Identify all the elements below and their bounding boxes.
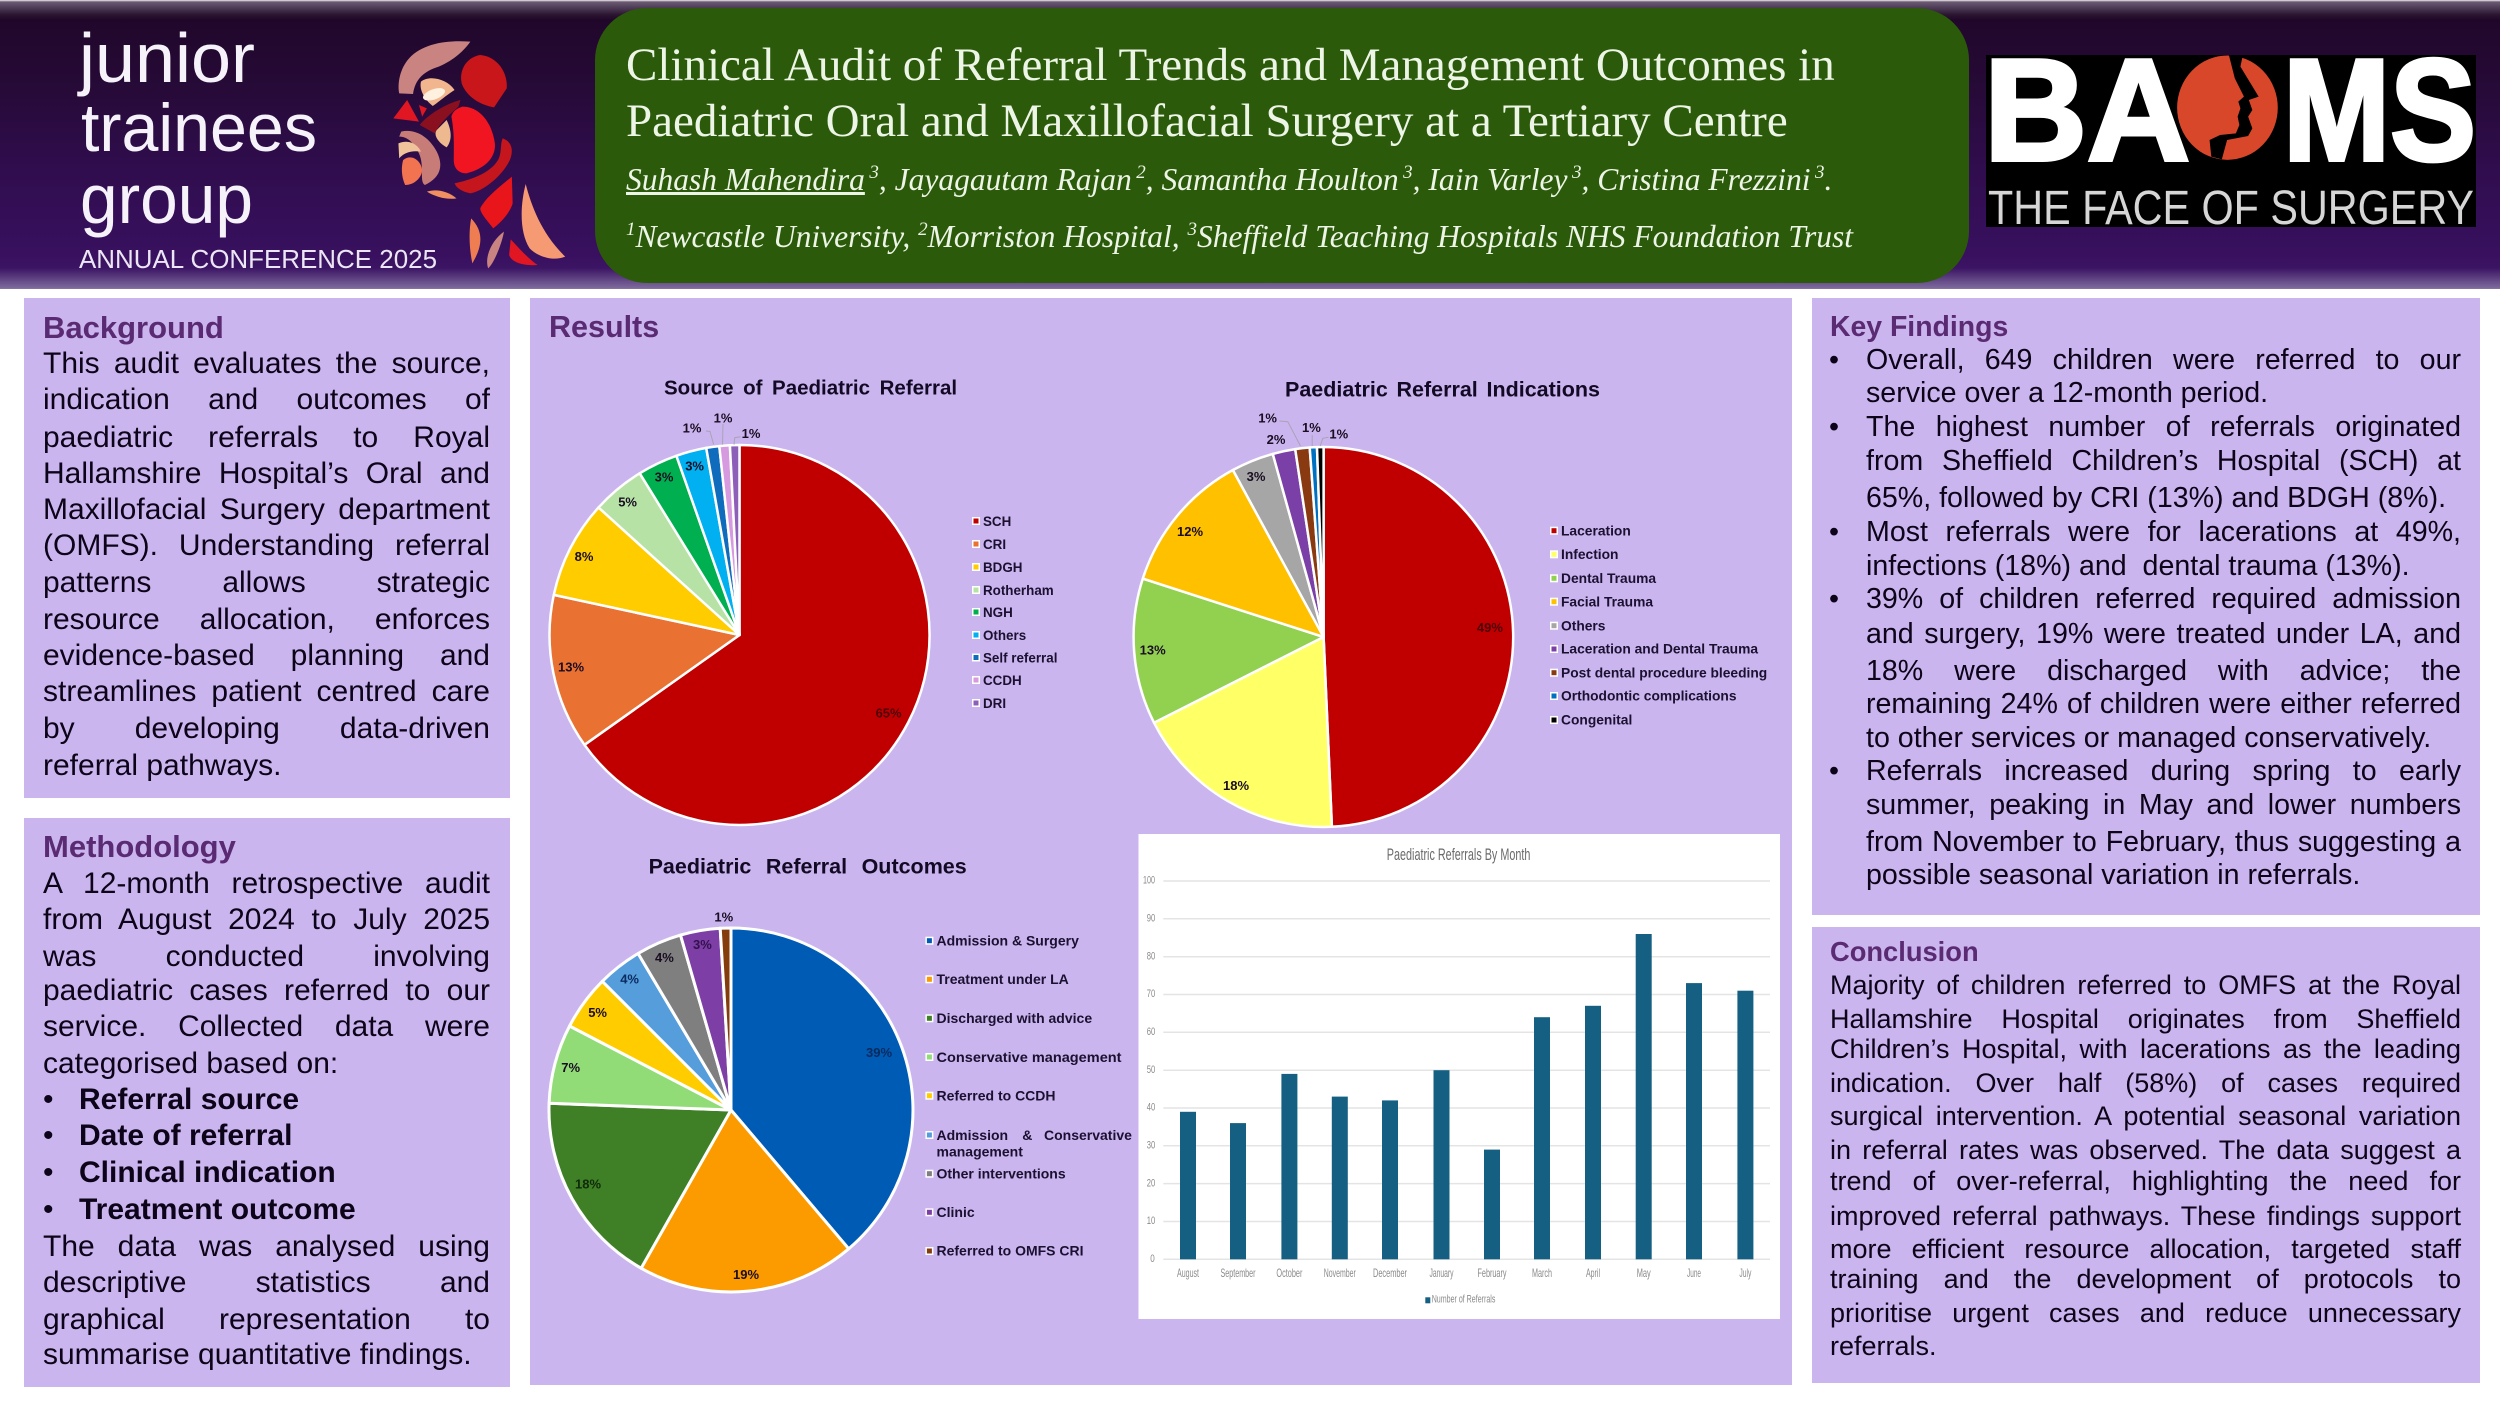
pie chart: source of paediatric referral: 1%: [742, 426, 761, 441]
legend: referral indications: Others: [1561, 618, 1606, 634]
bar chart: paediatric referrals by month: September: [1220, 1266, 1256, 1280]
legend: referral sources: Rotherham: [983, 583, 1054, 598]
pie chart: paediatric referral indications: 13%: [1140, 642, 1166, 658]
text block: conclusion: training and the development of protocols to: [1830, 1264, 2461, 1294]
list: key findings: •: [1829, 583, 1839, 615]
legend: referral outcomes: Referred to OMFS CRI: [936, 1242, 1084, 1258]
list: key findings: •: [1829, 411, 1839, 443]
text block: methodology analysis: The data was analysed using: [43, 1230, 490, 1263]
text block: background: Maxillofacial Surgery department: [43, 493, 490, 526]
legend: referral outcomes: Conservative management: [936, 1049, 1122, 1065]
list: key findings: Most referrals were for lacerations at 49%,: [1866, 516, 2461, 548]
list: key findings: 18% were discharged with advice; the: [1866, 655, 2461, 687]
legend: referral sources: BDGH: [983, 560, 1022, 575]
bar chart: paediatric referrals by month: October: [1276, 1266, 1302, 1280]
bar chart: paediatric referrals by month: May: [1637, 1266, 1651, 1280]
pie chart: paediatric referral indications: 12%: [1177, 524, 1203, 539]
text block: methodology intro: [43, 867, 490, 1080]
text block: background: evidence-based planning and: [43, 639, 490, 672]
pie chart: paediatric referral outcomes: 5%: [588, 1005, 607, 1020]
legend: referral sources: Others: [983, 628, 1026, 643]
logo: junior trainees group wordmark: junior: [77, 19, 255, 97]
text block: methodology analysis: [43, 1230, 490, 1371]
list: categorised data fields: •: [43, 1119, 54, 1152]
pie chart: paediatric referral indications: Paediatric Referral Indications: [1285, 378, 1600, 402]
text block: methodology analysis: descriptive statistics and: [43, 1266, 490, 1299]
heading: background: Background: [43, 310, 224, 345]
legend: referral outcomes: management: [936, 1144, 1023, 1160]
pie chart: paediatric referral outcomes: 39%: [866, 1045, 892, 1060]
legend: referral sources: SCH: [983, 514, 1011, 529]
text block: background: (OMFS). Understanding referral: [43, 529, 490, 562]
text block: conclusion: trend of over-referral, highlighting the need for: [1830, 1166, 2461, 1196]
list: key findings: remaining 24% of children were either referred: [1866, 688, 2461, 720]
list: categorised data fields: •: [43, 1193, 54, 1226]
bar chart: paediatric referrals by month: 50: [1147, 1064, 1155, 1076]
text block: conclusion: Children’s Hospital, with lacerations as the leading: [1830, 1034, 2461, 1064]
bar chart: paediatric referrals by month: December: [1373, 1266, 1407, 1280]
pie chart: paediatric referral indications: 18%: [1223, 778, 1249, 793]
legend: referral outcomes: Discharged with advice: [936, 1010, 1092, 1026]
heading: results: Results: [549, 310, 659, 344]
bar chart: paediatric referrals by month: Paediatric Referrals By Month: [1387, 845, 1530, 864]
legend: referral indications: Congenital: [1561, 712, 1632, 728]
list: categorised data fields: Treatment outcome: [79, 1193, 356, 1226]
list: key findings: summer, peaking in May and lower numbers: [1866, 789, 2461, 821]
pie chart: paediatric referral outcomes: 19%: [733, 1267, 759, 1282]
bar chart: paediatric referrals by month: 40: [1147, 1102, 1155, 1114]
title box: [595, 8, 1969, 283]
bar chart: paediatric referrals by month: 60: [1147, 1026, 1155, 1038]
text block: background: resource allocation, enforces: [43, 603, 490, 636]
list: categorised data fields: •: [43, 1083, 54, 1116]
legend: referral outcomes: Clinic: [936, 1204, 975, 1220]
text block: background: indication and outcomes of: [43, 383, 490, 416]
bar chart: paediatric referrals by month: 90: [1147, 912, 1155, 924]
pie chart: source of paediatric referral: 3%: [685, 458, 704, 474]
pie chart: paediatric referral indications: 3%: [1247, 469, 1266, 484]
pie chart: source of paediatric referral: 3%: [655, 470, 674, 484]
legend: referral indications: Infection: [1561, 547, 1618, 562]
list: key findings: from November to February, thus suggesting a: [1866, 826, 2461, 858]
legend: referral indications: Dental Trauma: [1561, 571, 1656, 586]
list: key findings: possible seasonal variation in referrals.: [1866, 859, 2360, 891]
list: key findings: Overall, 649 children were referred to our: [1866, 344, 2461, 376]
pie chart: source of paediatric referral: 65%: [876, 706, 902, 720]
list: categorised data fields: Clinical indication: [79, 1156, 336, 1189]
legend: referral sources: NGH: [983, 605, 1013, 620]
legend: referral indications: Laceration and Dental Trauma: [1561, 642, 1758, 656]
text block: background: paediatric referrals to Royal: [43, 420, 490, 454]
pie chart: source of paediatric referral: Source of Paediatric Referral: [664, 377, 957, 400]
charts container: [548, 377, 1780, 1319]
authors: Suhash Mahendira3, Jayagautam Rajan2, Samantha Houlton3, Iain Varley3, Cristina Frezzini3.: [626, 162, 1832, 196]
pie chart: paediatric referral outcomes: 4%: [655, 950, 674, 965]
legend: referral sources: DRI: [983, 696, 1006, 711]
list: key findings: to other services or managed conservatively.: [1866, 722, 2431, 754]
list: key findings: and surgery, 19% were treated under LA, and: [1866, 618, 2461, 650]
legend: referral sources: CCDH: [983, 673, 1022, 688]
logo: BAOMS The Face of Surgery: [1986, 55, 2476, 227]
text block: methodology analysis: graphical representation to: [43, 1303, 490, 1336]
text block: methodology intro: A 12-month retrospective audit: [43, 867, 490, 900]
pie chart: paediatric referral outcomes: [549, 854, 1132, 1292]
text block: background: referral pathways.: [43, 749, 281, 782]
list: key findings: 39% of children referred required admission: [1866, 583, 2461, 615]
bar chart: paediatric referrals by month: November: [1324, 1266, 1356, 1280]
text block: methodology intro: was conducted involving: [43, 940, 490, 973]
text block: conclusion: improved referral pathways. These findings support: [1830, 1201, 2461, 1231]
logo: junior trainees group wordmark: group: [80, 160, 253, 238]
pie chart: source of paediatric referral: [550, 377, 1057, 825]
pie chart: paediatric referral outcomes: 4%: [620, 972, 639, 986]
bar chart: paediatric referrals by month: 100: [1143, 874, 1155, 886]
legend: referral outcomes: Treatment under LA: [936, 971, 1069, 987]
legend: referral outcomes: Referred to CCDH: [936, 1088, 1056, 1104]
bar chart: paediatric referrals by month: February: [1478, 1266, 1506, 1280]
logo: junior trainees group wordmark: ANNUAL CONFERENCE 2025: [79, 244, 437, 274]
text block: conclusion: more efficient resource allocation, targeted staff: [1830, 1234, 2461, 1264]
legend: referral sources: CRI: [983, 537, 1006, 552]
panel: results: [530, 298, 1792, 1385]
affiliations: 1Newcastle University, 2Morriston Hospital, 3Sheffield Teaching Hospitals NHS Foundation Trust: [626, 218, 1853, 254]
bar chart: paediatric referrals by month: Number of Referrals: [1432, 1294, 1496, 1306]
list: key findings: •: [1829, 344, 1839, 376]
text block: background: [43, 347, 490, 782]
pie chart: paediatric referral indications: 49%: [1477, 620, 1503, 635]
heading: conclusion: Conclusion: [1830, 936, 1979, 966]
list: categorised data fields: •: [43, 1156, 54, 1189]
list: key findings: infections (18%) and dental trauma (13%).: [1866, 550, 2410, 582]
heading: methodology: Methodology: [43, 829, 236, 864]
legend: referral outcomes: Conservative: [1044, 1127, 1132, 1143]
title: Clinical Audit of Referral Trends and Management Outcomes in: [626, 39, 1835, 91]
pie chart: paediatric referral indications: 1%: [1302, 420, 1321, 435]
pie chart: paediatric referral indications: 2%: [1267, 432, 1286, 447]
text block: conclusion: indication. Over half (58%) of cases required: [1830, 1068, 2461, 1098]
list: categorised data fields: [43, 1083, 356, 1226]
logo: junior trainees group wordmark: [77, 19, 437, 274]
text block: conclusion: referrals.: [1830, 1331, 1937, 1361]
bar chart: paediatric referrals by month: 20: [1147, 1178, 1155, 1190]
pie chart: source of paediatric referral: 5%: [618, 494, 637, 510]
text block: background: by developing data-driven: [43, 712, 490, 745]
bar chart: paediatric referrals by month: 80: [1147, 950, 1155, 962]
pie chart: source of paediatric referral: 1%: [683, 420, 702, 436]
text block: conclusion: Majority of children referred to OMFS at the Royal: [1830, 970, 2461, 1000]
title: Paediatric Oral and Maxillofacial Surgery at a Tertiary Centre: [626, 95, 1788, 147]
pie chart: paediatric referral outcomes: 18%: [575, 1176, 601, 1192]
text block: background: patterns allows strategic: [43, 566, 490, 599]
bar chart: paediatric referrals by month: August: [1177, 1266, 1199, 1280]
text block: methodology analysis: summarise quantitative findings.: [43, 1338, 472, 1371]
bar chart: paediatric referrals by month: January: [1430, 1266, 1454, 1280]
text block: methodology intro: categorised based on:: [43, 1047, 338, 1080]
pie chart: source of paediatric referral: 1%: [714, 410, 733, 426]
pie chart: paediatric referral outcomes: 3%: [693, 937, 712, 952]
text block: conclusion: [1830, 970, 2462, 1361]
icon: stained glass face profile: [393, 41, 566, 268]
title: [626, 39, 1835, 147]
list: key findings: The highest number of referrals originated: [1866, 411, 2461, 443]
legend: referral indications: [1550, 524, 1767, 728]
panel: key findings: [1812, 298, 2480, 915]
logo: junior trainees group wordmark: trainees: [81, 90, 317, 166]
legend: referral sources: Self referral: [983, 650, 1057, 666]
text block: conclusion: surgical intervention. A potential seasonal variation: [1830, 1101, 2461, 1131]
panel: methodology: [24, 818, 510, 1387]
bar chart: paediatric referrals by month: [1138, 834, 1780, 1319]
list: key findings: service over a 12-month period.: [1866, 377, 2268, 409]
text block: methodology intro: paediatric cases referred to our: [43, 974, 490, 1007]
bar chart: paediatric referrals by month: 10: [1147, 1215, 1155, 1227]
list: categorised data fields: Referral source: [79, 1083, 299, 1116]
bar chart: paediatric referrals by month: 70: [1147, 988, 1155, 1000]
legend: referral outcomes: &: [1022, 1127, 1032, 1143]
legend: referral indications: Laceration: [1561, 524, 1631, 538]
pie chart: source of paediatric referral: 13%: [558, 660, 584, 674]
list: key findings: Referrals increased during spring to early: [1866, 755, 2461, 787]
bar chart: paediatric referrals by month: 30: [1147, 1140, 1155, 1152]
list: categorised data fields: Date of referral: [79, 1119, 292, 1152]
header banner: [0, 0, 2500, 289]
heading: key findings: Key Findings: [1830, 311, 2008, 343]
pie chart: source of paediatric referral: 8%: [575, 549, 594, 564]
text block: background: This audit evaluates the source,: [43, 347, 490, 380]
legend: referral indications: Orthodontic complications: [1561, 688, 1737, 704]
legend: referral indications: Post dental procedure bleeding: [1561, 666, 1767, 680]
legend: referral indications: Facial Trauma: [1561, 594, 1653, 610]
bar chart: paediatric referrals by month: March: [1532, 1266, 1552, 1280]
text block: methodology intro: from August 2024 to July 2025: [43, 903, 490, 936]
bar chart: paediatric referrals by month: June: [1687, 1266, 1701, 1280]
text block: background: Hallamshire Hospital’s Oral and: [43, 457, 490, 490]
text block: conclusion: prioritise urgent cases and reduce unnecessary: [1830, 1298, 2461, 1328]
text block: conclusion: in referral rates was observed. The data suggest a: [1830, 1135, 2461, 1165]
legend: referral outcomes: Admission: [936, 1127, 1008, 1143]
bar chart: paediatric referrals by month: July: [1739, 1266, 1751, 1280]
pie chart: paediatric referral outcomes: 7%: [561, 1060, 581, 1075]
pie chart: paediatric referral indications: 1%: [1329, 426, 1349, 442]
legend: referral outcomes: [925, 932, 1132, 1258]
pie chart: paediatric referral outcomes: Paediatric Referral Outcomes: [649, 854, 967, 878]
list: key findings: [1829, 344, 2462, 891]
list: key findings: from Sheffield Children’s Hospital (SCH) at: [1866, 445, 2461, 477]
list: key findings: •: [1829, 755, 1839, 787]
panel: background: [24, 298, 510, 798]
pie chart: paediatric referral outcomes: 1%: [714, 910, 734, 924]
text block: methodology intro: service. Collected data were: [43, 1010, 490, 1043]
bar chart: paediatric referrals by month: April: [1586, 1266, 1600, 1280]
legend: referral outcomes: Other interventions: [936, 1166, 1066, 1182]
text block: background: streamlines patient centred care: [43, 675, 490, 708]
text block: conclusion: Hallamshire Hospital originates from Sheffield: [1830, 1004, 2461, 1034]
list: key findings: •: [1829, 516, 1839, 548]
panel: conclusion: [1812, 926, 2480, 1383]
list: key findings: 65%, followed by CRI (13%) and BDGH (8%).: [1866, 482, 2446, 514]
bar chart: paediatric referrals by month: 0: [1150, 1253, 1155, 1265]
pie chart: paediatric referral indications: 1%: [1258, 410, 1277, 426]
legend: referral sources: [972, 514, 1057, 711]
legend: referral outcomes: Admission & Surgery: [936, 932, 1079, 948]
pie chart: paediatric referral indications: [1134, 378, 1767, 827]
